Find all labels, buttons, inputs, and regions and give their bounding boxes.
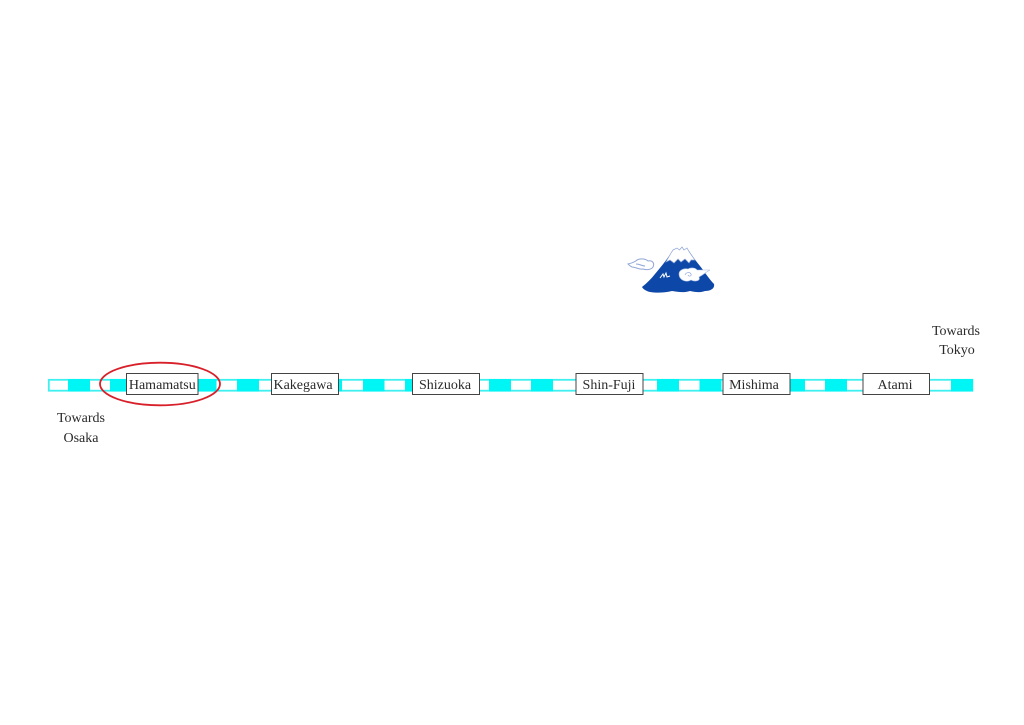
highlight: red ellipse around Hamamatsu [100,363,220,405]
label: Towards Tokyo: Towards [932,324,980,339]
station: Kakegawa: Kakegawa [273,378,333,393]
label: Towards Tokyo: Tokyo [939,343,975,358]
station: Mishima [723,374,790,394]
label: Towards Osaka: Towards [57,411,105,426]
station: Atami [863,374,930,394]
station: Kakegawa [272,374,338,394]
cloud on mountain [679,268,710,281]
snow cap [666,247,695,263]
drifting cloud [628,259,654,270]
station: Shizuoka: Shizuoka [419,378,472,393]
label: Towards Tokyo [932,324,980,358]
station: Shin-Fuji [576,374,643,394]
station: Shin-Fuji: Shin-Fuji [583,378,636,393]
station: Atami: Atami [878,378,913,393]
small white marks on slope [660,273,670,278]
railway line: striped cyan band [49,379,973,392]
label: Towards Osaka: Osaka [64,431,99,446]
station: Hamamatsu [126,374,198,394]
station: Hamamatsu: Hamamatsu [129,378,196,393]
station: Shizuoka [412,374,480,394]
station: Mishima: Mishima [729,378,780,393]
icon: Mount Fuji with clouds [628,247,714,293]
cloud swirl [685,273,691,276]
label: Towards Osaka [57,411,105,446]
mountain body [642,247,714,293]
